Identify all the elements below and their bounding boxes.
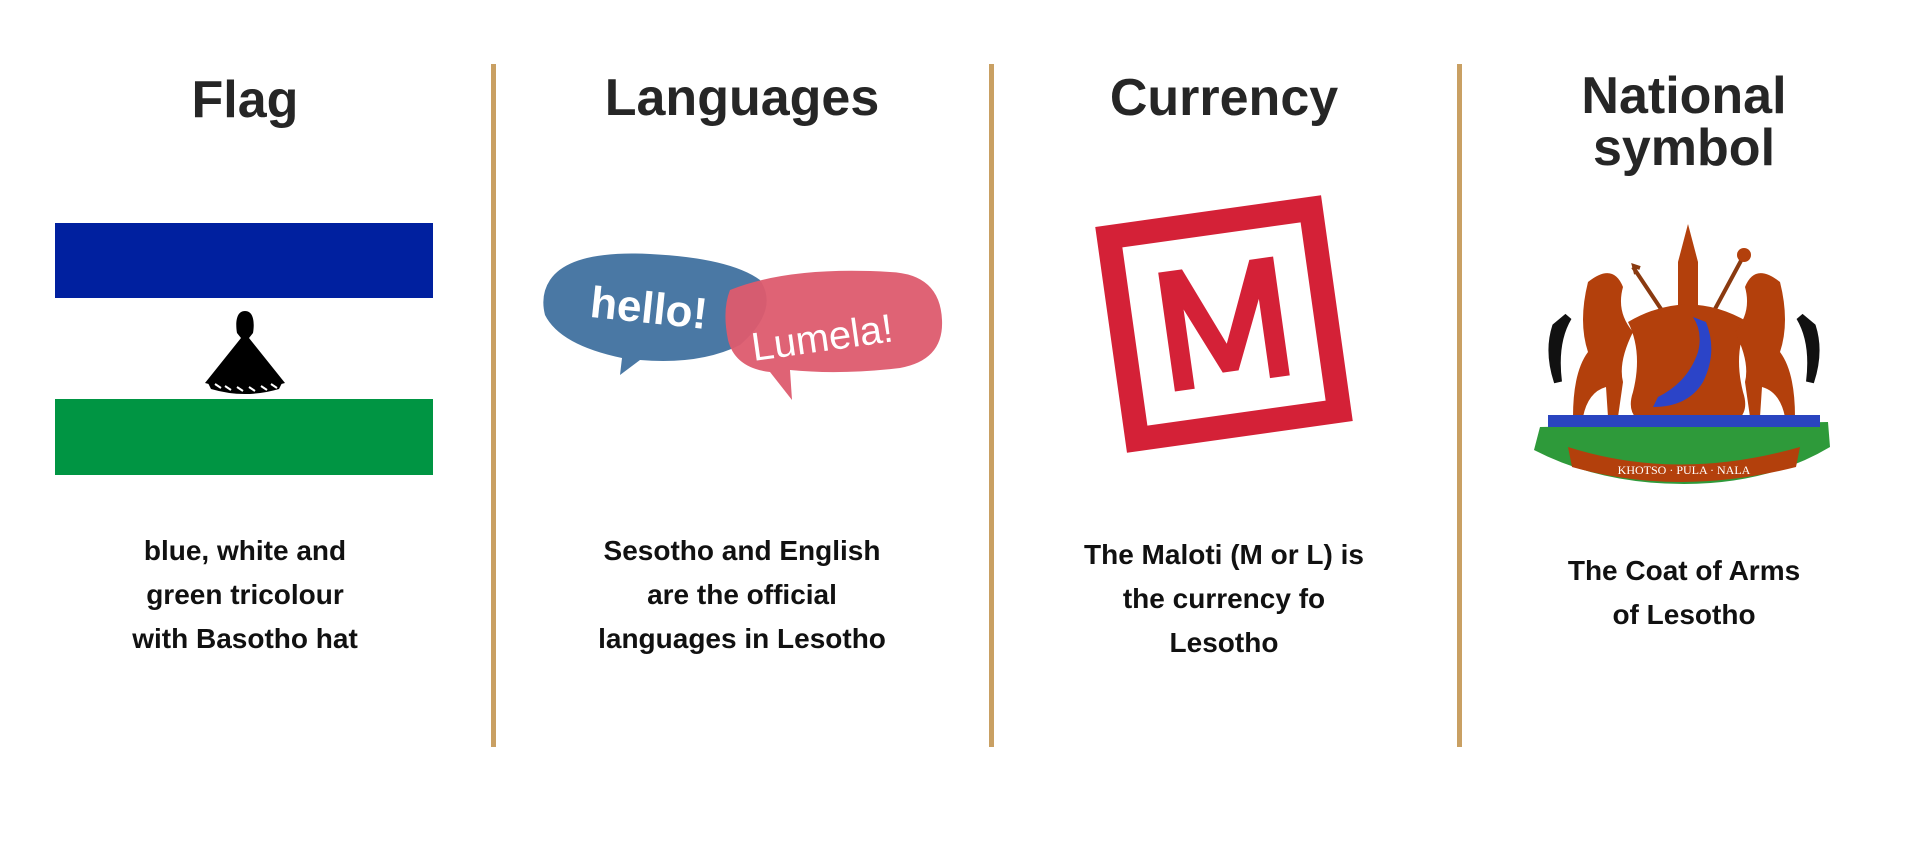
icon: coat of arms: KHOTSO · PULA · NALA [1618,463,1751,477]
text: flag description: with Basotho hat [132,623,358,654]
text: national symbol description: of Lesotho [1612,599,1756,630]
icon: speech bubbles [543,254,942,400]
title: Flag: Flag [192,71,298,129]
text: currency description: Lesotho [1170,627,1278,658]
title: Languages: Languages [605,69,879,127]
icon: Basotho hat [205,311,285,394]
title: Currency: Currency [1110,69,1338,127]
text: flag description: blue, white and [144,535,346,566]
title: National symbol [1581,67,1787,177]
text: currency description: the currency fo [1123,583,1325,614]
text: languages description: are the official [647,579,837,610]
text: currency description [1084,539,1364,658]
text: flag description [132,535,358,654]
text: currency description: The Maloti (M or L) is [1084,539,1364,570]
text: languages description: languages in Lesotho [598,623,886,654]
icon: Maloti M [1095,195,1353,453]
text: languages description: Sesotho and English [604,535,880,566]
text: national symbol description [1568,555,1800,630]
icon: coat of arms [1534,224,1830,484]
icon: Lesotho flag [55,223,433,475]
title: National symbol: National [1581,67,1787,125]
text: national symbol description: The Coat of Arms [1568,555,1800,586]
icon: speech bubbles: hello! [588,278,710,339]
text: flag description: green tricolour [146,579,344,610]
title: National symbol: symbol [1593,119,1775,177]
icon: speech bubbles: Lumela! [749,306,896,370]
text: languages description [598,535,886,654]
